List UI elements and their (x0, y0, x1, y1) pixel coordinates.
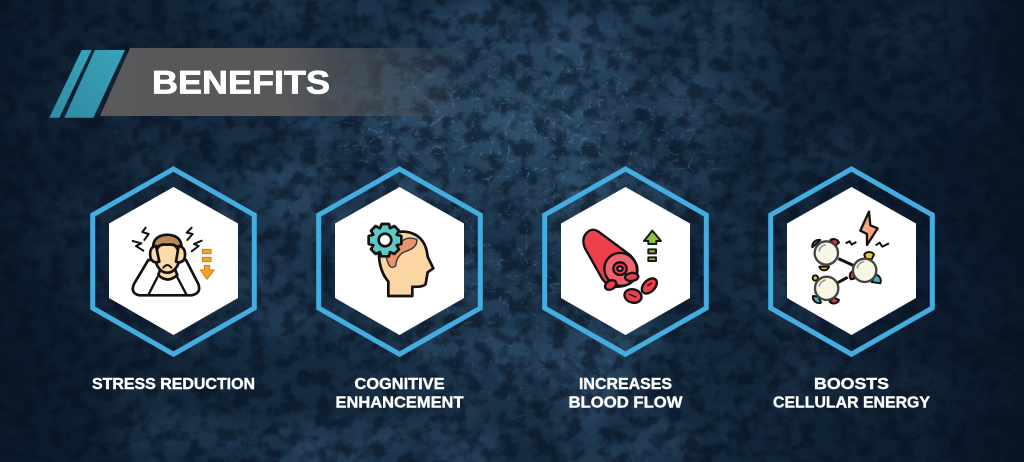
icon: blood vessel (583, 230, 661, 305)
hexagon frame (545, 169, 706, 354)
benefit: increases blood flow (545, 169, 706, 412)
teal slanted stripe wide (64, 50, 125, 118)
benefit: cognitive enhancement: ENHANCEMENT (336, 394, 464, 412)
heading: BENEFITS (152, 64, 330, 100)
hexagon frame (319, 169, 480, 354)
label: BOOSTS (814, 376, 889, 393)
teal slanted stripe thin (49, 50, 92, 118)
label: STRESS REDUCTION (92, 376, 255, 393)
icon: head with gear (369, 224, 433, 296)
label: COGNITIVE (354, 376, 444, 393)
benefit: cognitive enhancement (319, 169, 480, 412)
hexagon frame (771, 169, 932, 354)
icon: molecule and energy bolt (812, 212, 889, 303)
banner grey fading band (100, 48, 470, 116)
hexagon frame (93, 169, 254, 354)
icon: stressed person (133, 228, 214, 295)
benefit: increases blood flow: BLOOD FLOW (568, 394, 683, 412)
label: INCREASES (579, 376, 672, 393)
benefit: stress reduction (92, 169, 255, 393)
benefit: boosts cellular energy (771, 169, 932, 412)
benefit: boosts cellular energy: CELLULAR ENERGY (773, 394, 930, 412)
title banner (49, 48, 470, 118)
